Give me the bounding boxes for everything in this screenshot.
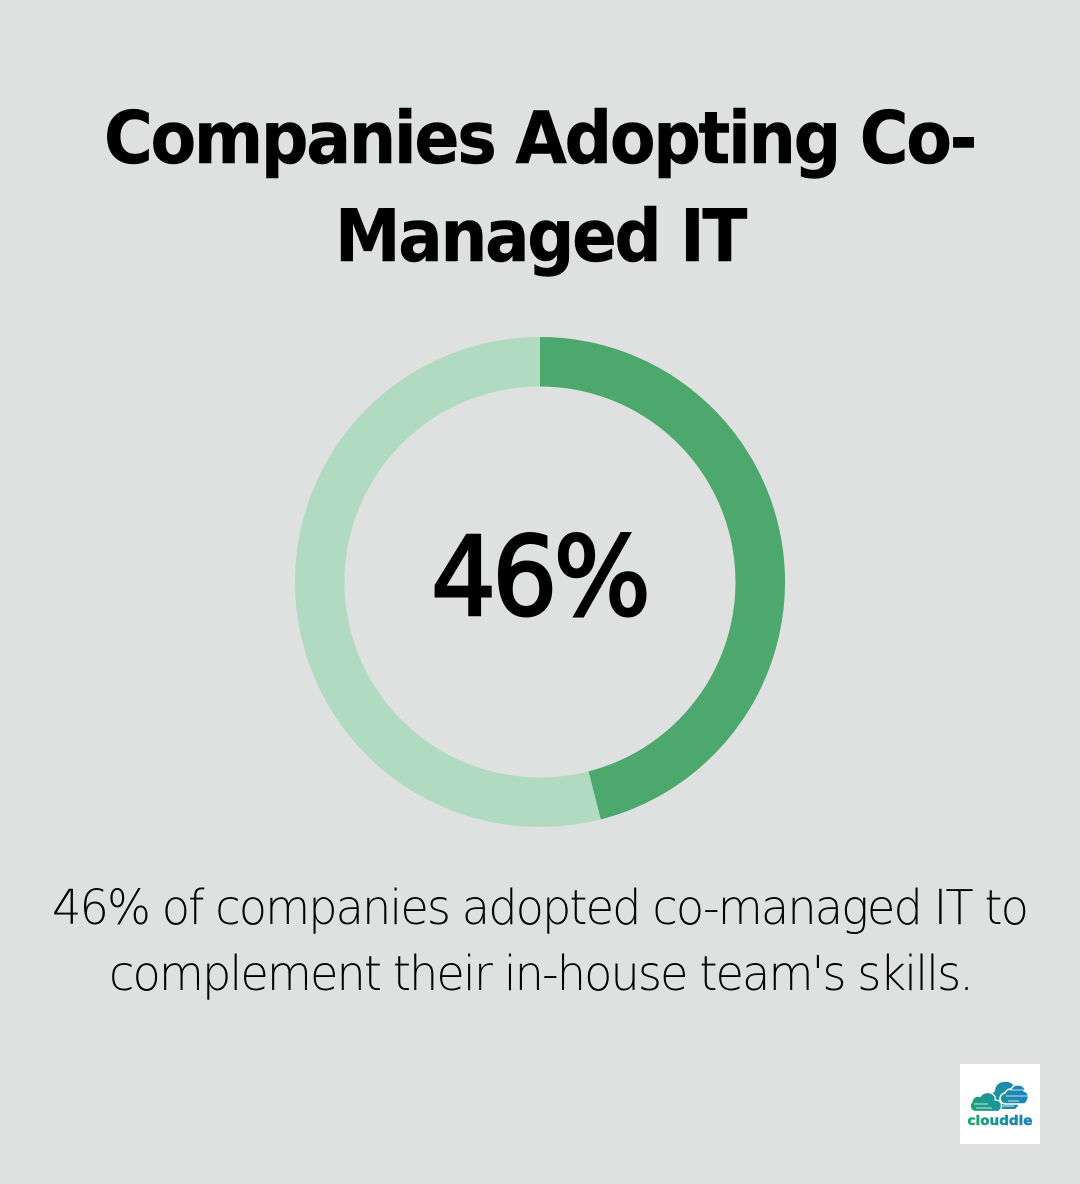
front cloud xyxy=(1000,1085,1029,1104)
donut segment: 46% xyxy=(540,362,760,795)
description text xyxy=(52,880,1027,1002)
title: Companies Adopting Co- xyxy=(104,96,975,180)
icon: clouds xyxy=(970,1082,1030,1112)
back cloud crescent xyxy=(992,1082,1018,1109)
donut chart: 46% xyxy=(320,362,760,802)
description text: 46% of companies adopted co-managed IT to xyxy=(52,880,1027,936)
left cloud xyxy=(970,1092,1002,1112)
logo: clouddle xyxy=(960,1064,1040,1144)
logo wordmark: clouddle xyxy=(968,1114,1033,1129)
logo background xyxy=(960,1064,1040,1144)
donut center value: 46% xyxy=(431,514,647,640)
title: Managed IT xyxy=(335,194,747,278)
title xyxy=(104,96,975,278)
donut track: remaining 54% xyxy=(320,362,760,802)
description text: complement their in-house team's skills. xyxy=(109,946,972,1002)
